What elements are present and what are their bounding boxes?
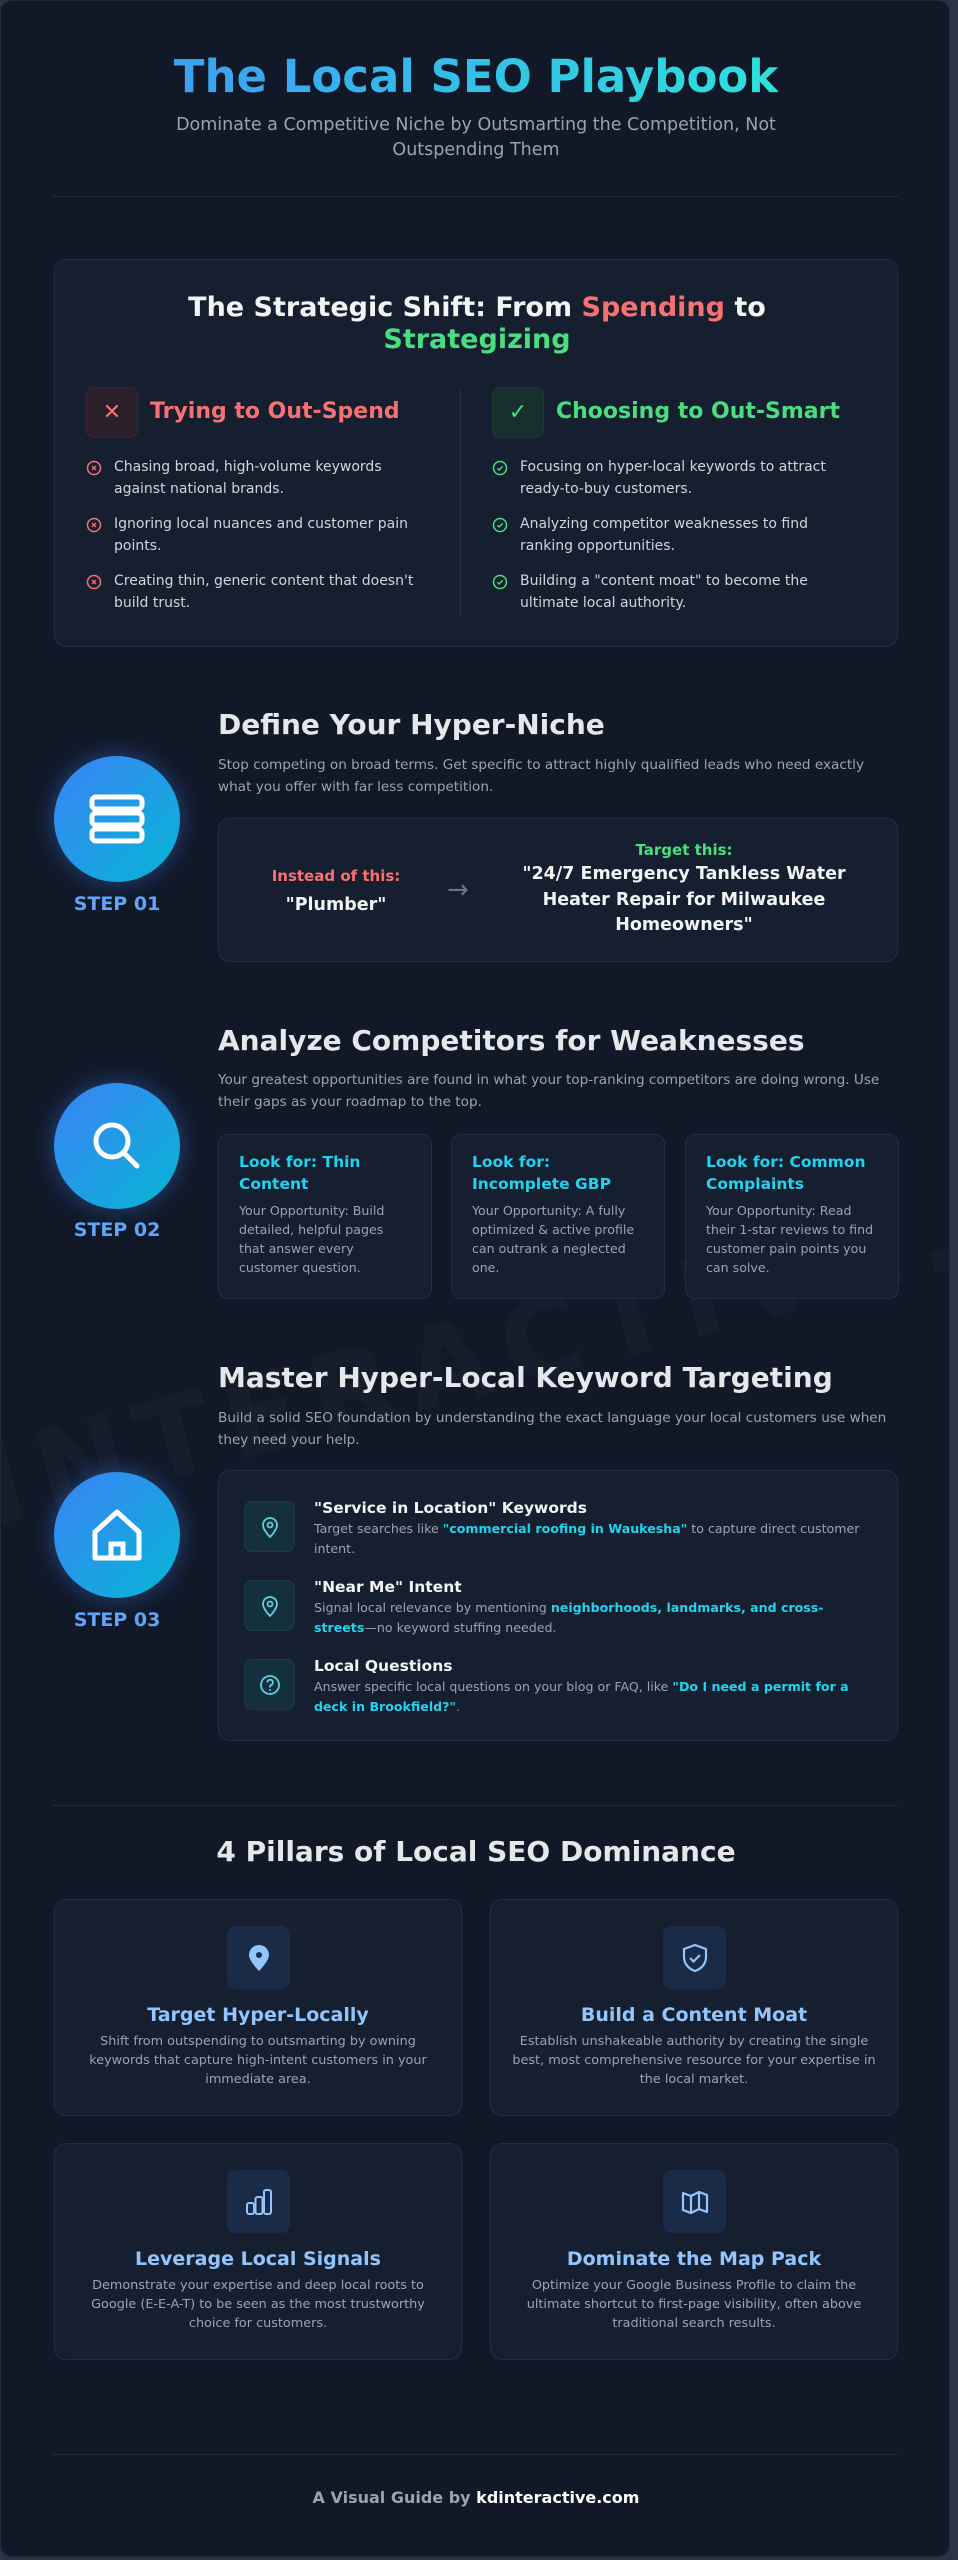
pillar: local signals <box>54 2143 462 2360</box>
step 01 icon <box>54 756 180 882</box>
icon: check: ✓ <box>509 400 527 425</box>
column: out-spend: Ignoring local nuances and customer pain points. <box>114 516 408 554</box>
card: incomplete gbp: Look for: Incomplete GBP <box>472 1153 611 1193</box>
pillar: map pack <box>490 2143 898 2360</box>
icon: x: ✕ <box>103 400 121 425</box>
desc: keywords: Build a solid SEO foundation by understanding the exact language your local customers use when they need your help. <box>218 1410 886 1448</box>
instead of <box>272 867 400 915</box>
arrow: → <box>447 875 469 905</box>
pillar: map pack: Dominate the Map Pack <box>567 2248 821 2270</box>
instead of: "Plumber" <box>286 895 386 915</box>
subtitle: Dominate a Competitive Niche by Outsmarting the Competition, Not Outspending Them <box>176 115 776 160</box>
panel: keyword types <box>218 1470 898 1741</box>
column: out-smart <box>492 387 840 611</box>
heading: analyze: Analyze Competitors for Weaknesses <box>218 1024 804 1057</box>
step 01 label: STEP 01 <box>74 893 160 915</box>
bullets: Focusing on hyper-local keywords to attract ready-to-buy customers. <box>520 459 826 497</box>
pillar: map pack: Optimize your Google Business Profile to claim the ultimate shortcut to first-page visibility, often above traditional search results. <box>527 2278 861 2331</box>
pillar: content moat <box>490 1899 898 2116</box>
heading: out-smart: Choosing to Out-Smart <box>556 399 840 424</box>
pillar: content moat: Establish unshakeable authority by creating the single best, most comprehensive resource for your expertise in the local market. <box>512 2034 876 2087</box>
item: near me: Signal local relevance by mentioning neighborhoods, landmarks, and cross-streets—no keyword stuffing needed. <box>314 1600 824 1634</box>
item: service in location: "Service in Location" Keywords <box>314 1499 587 1517</box>
item: local questions: Local Questions <box>314 1657 452 1675</box>
item: near me <box>244 1578 824 1634</box>
target this: "24/7 Emergency Tankless Water Heater Repair for Milwaukee Homeowners" <box>522 864 846 935</box>
shift heading: The Strategic Shift: From Spending to <box>188 292 766 323</box>
step 02 label: STEP 02 <box>74 1219 160 1241</box>
target this: Target this: <box>635 841 733 859</box>
column: out-spend <box>86 387 414 611</box>
panel: strategic shift <box>54 259 898 647</box>
icon: x <box>86 387 138 438</box>
heading: define: Define Your Hyper-Niche <box>218 708 605 741</box>
pillar: local signals: Demonstrate your expertise and deep local roots to Google (E-E-A-T) to be seen as the most trustworthy choice for customers. <box>91 2278 425 2331</box>
shift heading <box>188 292 766 355</box>
step 03 icon <box>54 1472 180 1598</box>
column: out-spend: Creating thin, generic content that doesn't build trust. <box>114 573 413 611</box>
card: thin content: Your Opportunity: Build detailed, helpful pages that answer every customer question. <box>239 1203 384 1275</box>
column: out-smart: Building a "content moat" to become the ultimate local authority. <box>520 573 808 611</box>
item: service in location: Target searches like "commercial roofing in Waukesha" to capture direct customer <box>314 1521 859 1536</box>
card: thin content: Look for: Thin Content <box>239 1153 360 1193</box>
panel: niche compare <box>218 818 898 962</box>
item: near me: "Near Me" Intent <box>314 1578 462 1596</box>
card: incomplete gbp: Your Opportunity: A fully optimized & active profile can outrank a neglected one. <box>472 1203 634 1275</box>
item: service in location <box>244 1499 860 1556</box>
pillar: target hyper-locally: Target Hyper-Locally <box>147 2004 369 2026</box>
pillar: local signals: Leverage Local Signals <box>135 2248 381 2270</box>
card: complaints: Look for: Common Complaints <box>706 1153 866 1193</box>
item: local questions <box>244 1657 849 1714</box>
heading: keywords: Master Hyper-Local Keyword Targeting <box>218 1361 833 1394</box>
heading: pillars: 4 Pillars of Local SEO Dominance <box>216 1835 736 1868</box>
card: thin content <box>218 1134 432 1299</box>
column: out-smart: Analyzing competitor weaknesses to find ranking opportunities. <box>520 516 808 554</box>
desc: define: Stop competing on broad terms. Get specific to attract highly qualified leads who need exactly what you offer with far less competition. <box>218 757 864 795</box>
title: The Local SEO Playbook <box>174 50 778 103</box>
step 02 icon <box>54 1083 180 1209</box>
pillar: target hyper-locally: Shift from outspending to outsmarting by owning keywords that capture high-intent customers in your immediate area. <box>89 2034 427 2087</box>
card: complaints: Your Opportunity: Read their 1-star reviews to find customer pain points you can solve. <box>706 1203 873 1275</box>
step 03 label: STEP 03 <box>74 1609 160 1631</box>
pillar: target hyper-locally <box>54 1899 462 2116</box>
icon: check <box>492 387 544 438</box>
heading: out-spend: Trying to Out-Spend <box>150 399 400 424</box>
item: local questions: Answer specific local questions on your blog or FAQ, like "Do I need a permit for a deck in Brookfield?". <box>314 1679 849 1714</box>
instead of: Instead of this: <box>272 867 400 885</box>
pillar: content moat: Build a Content Moat <box>581 2004 807 2026</box>
bullets: Chasing broad, high-volume keywords against national brands. <box>114 459 382 497</box>
item: service in location: intent. <box>314 1540 355 1556</box>
footer: A Visual Guide by kdinteractive.com <box>313 2488 639 2507</box>
shift heading: Strategizing <box>383 324 571 355</box>
card: complaints <box>685 1134 899 1299</box>
desc: analyze: Your greatest opportunities are found in what your top-ranking competitors are doing wrong. Use their gaps as your roadmap to the top. <box>218 1072 879 1110</box>
card: incomplete gbp <box>451 1134 665 1299</box>
